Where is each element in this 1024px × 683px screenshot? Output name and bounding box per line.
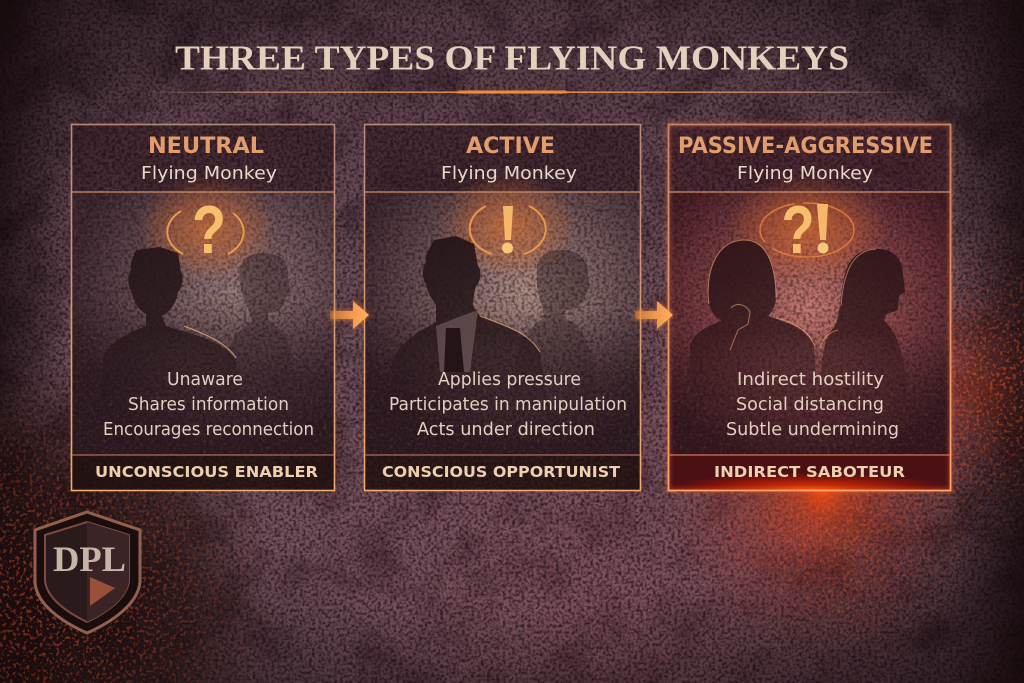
back figure <box>526 250 593 375</box>
neutral traits: Shares information <box>128 394 289 415</box>
passive-aggressive silhouettes <box>690 240 908 410</box>
panel: passive-aggressive <box>668 124 951 491</box>
neutral subheading: Flying Monkey <box>141 163 277 184</box>
logo: DPL shield <box>35 512 140 633</box>
neutral icon: question mark in ring: ? <box>192 192 226 268</box>
passive-aggressive icon: interrobang in ring: ? <box>782 192 814 268</box>
passive-aggressive icon: interrobang in ring <box>727 174 887 282</box>
left woman with hand at chin <box>690 240 818 410</box>
active heading: ACTIVE <box>466 134 555 159</box>
active footer label: CONSCIOUS OPPORTUNIST <box>382 463 621 481</box>
passive-aggressive traits: Social distancing <box>736 394 884 415</box>
neutral frame <box>72 124 334 490</box>
front figure <box>104 247 238 388</box>
active traits: Applies pressure <box>438 369 581 390</box>
neutral panel backgrounds <box>71 124 335 491</box>
active traits: Participates in manipulation <box>389 394 627 415</box>
neutral icon: question mark in ring <box>138 176 278 280</box>
passive-aggressive traits: Subtle undermining <box>726 419 899 440</box>
panel: active <box>364 124 641 491</box>
neutral traits: Unaware <box>167 369 243 390</box>
active icon: exclamation in ring <box>438 174 578 278</box>
active traits: Acts under direction <box>417 419 595 440</box>
shirt and tie <box>436 310 478 372</box>
active silhouettes <box>392 236 593 396</box>
rim lights and hand detail <box>708 240 876 350</box>
neutral silhouettes <box>104 247 293 394</box>
arrow: neutral to active <box>330 300 370 330</box>
back figure <box>228 253 293 368</box>
right woman in profile <box>820 248 906 394</box>
passive-aggressive panel backgrounds <box>668 124 951 491</box>
passive-aggressive subheading: Flying Monkey <box>737 163 873 184</box>
passive-aggressive traits: Indirect hostility <box>737 369 884 390</box>
active traits <box>389 369 627 440</box>
active panel backgrounds <box>364 124 641 491</box>
passive-aggressive heading: PASSIVE-AGGRESSIVE <box>678 134 933 159</box>
panel: neutral <box>71 124 335 491</box>
title: THREE TYPES OF FLYING MONKEYS <box>175 38 849 78</box>
passive-aggressive footer label: INDIRECT SABOTEUR <box>714 463 905 481</box>
active subheading: Flying Monkey <box>441 163 577 184</box>
neutral traits <box>103 369 314 440</box>
title underline <box>140 90 915 94</box>
neutral footer label: UNCONSCIOUS ENABLER <box>95 463 318 481</box>
neutral traits: Encourages reconnection <box>103 419 314 440</box>
front suit figure <box>392 236 544 390</box>
logo letters: DPL <box>53 539 126 579</box>
active frame <box>364 124 640 490</box>
arrow: active to passive-aggressive <box>635 300 674 330</box>
passive-aggressive traits <box>726 369 899 440</box>
logo play triangle <box>90 577 115 606</box>
passive-aggressive frame <box>668 124 950 490</box>
neutral heading: NEUTRAL <box>148 134 264 159</box>
